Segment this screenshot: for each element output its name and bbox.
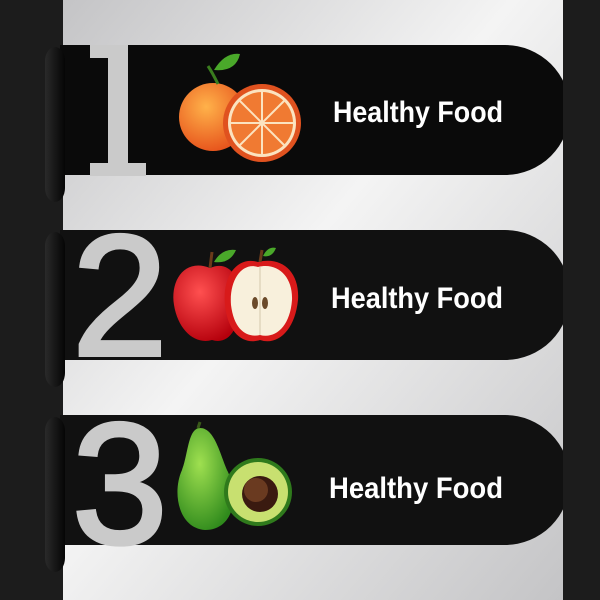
number 1 [90,45,146,176]
text 3: Healthy Food [329,472,503,505]
banner 1 [45,45,570,202]
text 2: Healthy Food [331,282,503,315]
number 3: 3 [72,388,168,580]
banner 3 [45,415,570,572]
icon: orange [179,54,301,162]
number 2: 2 [72,200,168,392]
banner 2 [45,230,570,387]
icon: avocado [177,422,292,530]
icon: apple [173,248,298,341]
text 1: Healthy Food [333,96,503,129]
